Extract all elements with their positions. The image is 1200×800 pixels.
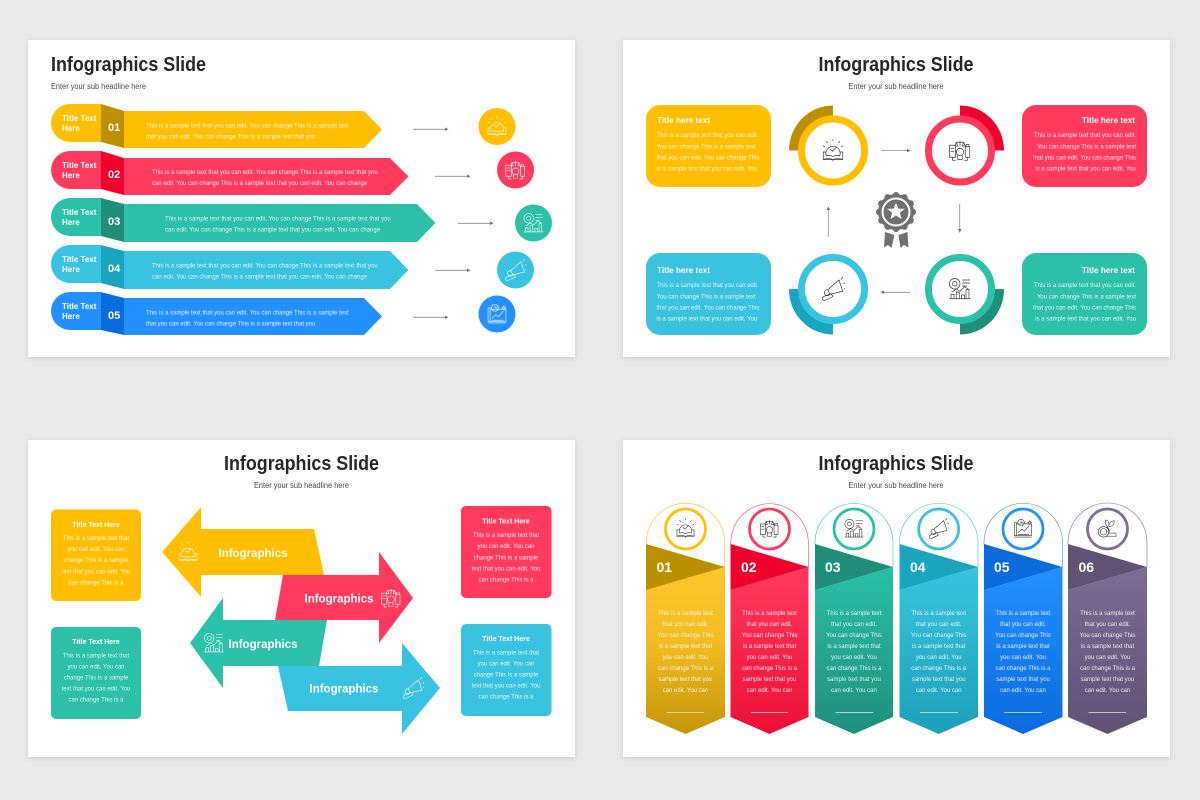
column 01: 01 [656,559,672,575]
arrow: yellow: Infographics [218,547,288,560]
row 05: that you can edit. You can change This is a sample text that you [146,322,315,328]
card: bottom right: is a sample text that you can edit. You [1035,317,1136,323]
card: top left: This is a sample text that you can edit. [656,133,759,139]
column 05: You can change This [995,633,1051,639]
ring: chart [928,258,1004,334]
card: blue: Title Text Here [482,636,530,643]
card: teal: Title Text Here [72,639,120,646]
card: top left: Title here text [657,116,710,125]
row 02: can edit. You can change This is a sample text that you can edit. You can change [152,181,368,187]
card: bottom right: Title here text [1082,266,1135,275]
column 03: you can edit. You [831,655,877,661]
row 04: Title Text [62,255,97,264]
card: bottom right [1022,253,1147,335]
card: teal: text that you can edit. You [62,687,130,693]
card: red: you can edit. You can [477,544,535,550]
arrow row 02 [435,174,470,178]
arrow row 05 [413,316,448,319]
slide 4: six banner columns [623,440,1170,757]
column 03: This is a sample text [827,611,882,617]
icon circle: book [478,108,516,145]
row 03: Title Text [62,208,97,217]
arrow: teal: Infographics [228,638,298,651]
row 04: can edit. You can change This is a sample text that you can edit. You can change [152,274,368,280]
column 04 [900,503,978,734]
row 01: 01 [108,122,120,134]
row 03: Here [62,218,80,227]
title: Infographics Slide [224,453,379,475]
arrow row 04 [435,268,470,272]
row 02: Title Text [62,161,97,170]
icon: award badge [876,192,916,248]
column 04: that you can edit. [916,622,962,628]
card: blue: This is a sample text that [473,650,540,656]
card: red: change This is a sample [474,555,539,561]
arrow: right [958,204,962,233]
column 01 [646,503,725,734]
column 06: is a sample text that [1081,644,1135,650]
column 01: sample text that you [659,677,712,683]
card: red [461,506,552,598]
card: blue: text that you can edit. You [472,683,540,689]
column 03: You can change This [826,633,882,639]
card: bottom left: You can change This is a sample text [656,294,756,300]
row 04 [51,245,408,289]
column 03: 03 [825,559,841,575]
column 01: You can change This [658,633,713,639]
column 02: You can change This [742,633,797,639]
arrow: teal [190,598,327,688]
subtitle: Enter your sub headline here [254,481,350,490]
column 03: can change This is a [827,666,882,672]
column 01: can change This is a [658,666,714,672]
column 04: sample text that you [912,677,966,683]
column 06: can edit. You can [1085,688,1130,694]
row 04: Here [62,265,80,274]
row 03: can edit. You can change This is a sample text that you can edit. You can change [165,228,381,234]
column 03 [815,503,893,734]
column 04: can change This is a [911,666,967,672]
ring: book [789,106,864,182]
column 02: you can edit. You [747,655,792,661]
column 05: This is a sample text [996,611,1051,617]
card: teal: This is a sample text that [63,653,130,659]
card: red: Title Text Here [482,518,530,526]
row 01 [51,104,382,148]
card: yellow: This is a sample text that [63,536,130,542]
column 05: is a sample text that [996,644,1050,650]
arrow: red [275,552,413,643]
slide 3: interlocking arrows [28,440,575,757]
card: top right: is a sample text that you can edit. You [1035,167,1136,173]
arrow row 03 [458,222,494,225]
column 01: This is a sample text [658,611,713,617]
column 02 [730,504,808,734]
row 05 [51,292,382,335]
card: bottom right: that you can edit. You can change This [1033,306,1136,312]
column 05: can edit. You can [1000,688,1046,694]
column 01: is a sample text that [659,644,713,650]
column 02: This is a sample text [742,611,797,617]
column 01: can edit. You can [663,688,708,694]
column 03: can edit. You can [831,688,877,694]
arrow: left [826,206,830,237]
card: red: can change This is a [479,577,534,583]
subtitle: Enter your sub headline here [848,481,944,490]
arrow row 01 [413,128,448,131]
row 03: This is a sample text that you can edit. You can change This is a sample text that you [165,216,391,222]
column 04: You can change This [911,633,967,639]
card: top left: that you can edit. You can change This [656,156,759,162]
column 04: is a sample text that [912,644,966,650]
card: top left: You can change This is a sample text [656,144,756,150]
card: bottom left: is a sample text that you can edit. You [656,317,757,323]
column 06: You can change This [1080,633,1135,639]
column 06: you can edit. You [1085,655,1130,661]
row 03: 03 [108,216,120,228]
column 01: that you can edit. [663,622,709,628]
card: top left [646,105,771,187]
column 06: that you can edit. [1085,622,1131,628]
row 01: that you can edit. You can change This is a sample text that you [146,134,315,140]
card: top right [1022,105,1147,187]
card: bottom left [646,253,771,335]
row 05: Title Text [62,302,97,311]
row 02 [51,151,408,195]
column 06: This is a sample text [1080,611,1135,617]
arrow: cyan [278,643,440,734]
column 06 [1068,503,1147,734]
row 05: Here [62,312,80,321]
row 03 [51,198,436,242]
title: Infographics Slide [818,453,974,475]
card: teal: you can edit. You can [67,664,125,670]
subtitle: Enter your sub headline here [51,82,147,91]
column 05: you can edit. You [1000,655,1046,661]
row 02: Here [62,171,80,180]
subtitle: Enter your sub headline here [848,82,944,91]
card: top right: Title here text [1082,116,1135,125]
card: top left: is a sample text that you can edit. You [656,167,757,173]
column 03: that you can edit. [831,622,877,628]
card: yellow: change This is a sample [64,558,129,564]
card: yellow: can change This is a [69,580,124,586]
arrow: red: Infographics [304,592,374,606]
card: top right: that you can edit. You can change This [1033,156,1136,162]
title: Infographics Slide [818,54,974,76]
row 01: Here [62,124,80,133]
row 04: 04 [108,263,121,275]
card: red: text that you can edit. You [472,566,540,572]
card: blue [461,624,552,716]
column 05: 05 [994,559,1010,575]
column 05: can change This is a [996,666,1051,672]
arrow: bottom [880,290,910,294]
column 02: can edit. You can [747,688,792,694]
column 01: you can edit. You [663,655,708,661]
icon circle: scale [497,152,534,188]
icon circle: chart [515,204,552,242]
arrow: cyan: Infographics [310,682,378,696]
row 02: 02 [108,169,120,181]
ring: megaphone [789,258,864,334]
card: bottom left: Title here text [657,266,710,275]
card: top right: You can change This is a sample text [1037,144,1136,150]
icon circle: laptop [478,296,516,332]
card: top right: This is a sample text that you can edit. [1034,133,1136,139]
column 03: sample text that you [827,677,881,683]
card: bottom right: This is a sample text that you can edit. [1034,283,1136,289]
column 06: 06 [1078,559,1094,575]
card: blue: can change This is a [479,694,534,700]
column 05: that you can edit. [1000,622,1046,628]
arrow: top [881,149,910,152]
card: blue: change This is a sample [474,672,539,678]
column 02: 02 [741,559,757,575]
column 04: you can edit. You [916,655,962,661]
arrow: yellow [162,507,324,597]
column 04: can edit. You can [916,688,962,694]
column 04: This is a sample text [911,611,966,617]
card: bottom left: This is a sample text that you can edit. [656,283,759,289]
card: yellow: you can edit. You can [67,547,125,553]
ring: scale [928,106,1004,182]
row 01: This is a sample text that you can edit. You can change This is a sample text [146,124,349,130]
column 02: sample text that you [743,677,796,683]
column 05 [984,503,1062,734]
column 06: can change This is a [1080,666,1136,672]
slide 1: five arrow rows [28,40,575,357]
column 02: that you can edit. [747,622,793,628]
card: yellow [51,510,141,601]
title: Infographics Slide [51,54,206,76]
column 02: can change This is a [742,666,798,672]
row 01: Title Text [62,114,97,123]
card: teal [51,627,141,719]
row 02: This is a sample text that you can edit. You can change This is a sample text that you [152,170,378,176]
icon circle: megaphone [497,252,534,288]
card: bottom right: You can change This is a sample text [1037,294,1136,300]
card: teal: can change This is a [69,698,124,704]
column 05: sample text that you [996,677,1050,683]
column 03: is a sample text that [827,644,881,650]
card: bottom left: that you can edit. You can change This [656,306,759,312]
column 06: sample text that you [1081,677,1134,683]
row 05: 05 [108,310,120,322]
row 04: This is a sample text that you can edit. You can change This is a sample text that you [152,264,378,270]
card: yellow: Title Text Here [72,522,120,529]
card: red: This is a sample text that [473,533,540,539]
card: yellow: text that you can edit. You [62,569,130,575]
card: blue: you can edit. You can [477,661,535,667]
row 05: This is a sample text that you can edit. You can change This is a sample text [146,310,349,316]
column 02: is a sample text that [743,644,797,650]
slide 2: circular process [623,40,1170,357]
column 04: 04 [910,559,926,575]
card: teal: change This is a sample [64,675,129,681]
